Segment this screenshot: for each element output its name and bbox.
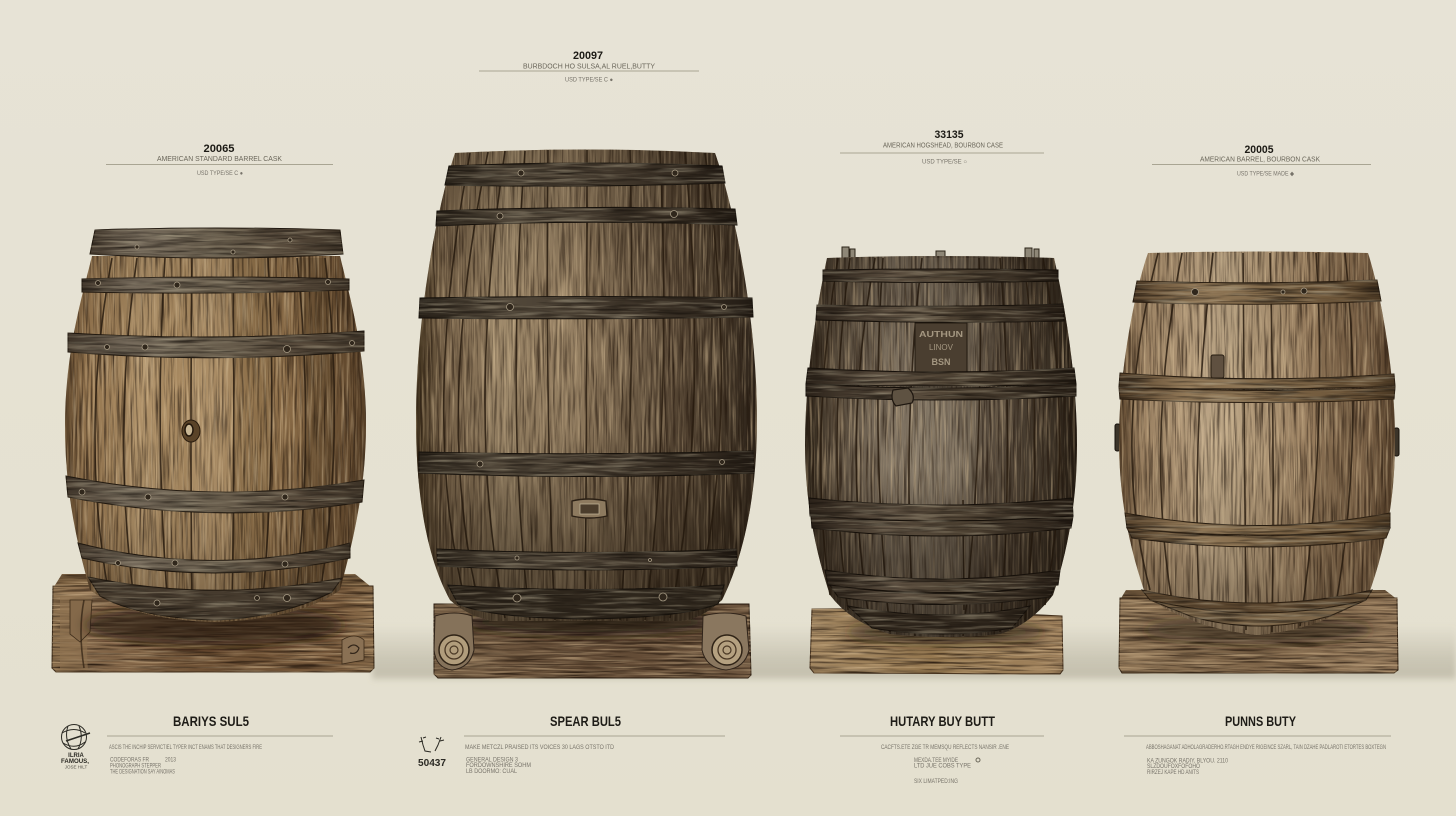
capacity label 4 <box>1152 144 1371 178</box>
icon: antlers: 50437 <box>418 758 446 769</box>
rivets 2 <box>477 170 726 602</box>
icon: globe seal: JOSE HILT <box>65 764 87 770</box>
barrel body 1 <box>65 256 366 622</box>
barrel 4: Punns Buty <box>1115 252 1399 673</box>
capacity label 4: USD TYPE/SE MADE ◆ <box>1237 172 1294 178</box>
capacity label 1: 20065 <box>204 143 234 155</box>
hasp 3 <box>892 388 913 406</box>
wooden base 3 <box>810 609 1063 674</box>
footer: Bariys Sul5: CODEFORAS FR <box>110 758 150 764</box>
barrel 1: Bariys Sul5 <box>52 228 374 672</box>
footer: Bariys Sul5: PHONOGRAPH STEPPER <box>110 764 161 770</box>
footer: Punns Buty: PUNNS BUTY <box>1225 713 1297 729</box>
footer: Spear Bul5 <box>464 713 725 775</box>
icon: antlers <box>418 737 446 769</box>
capacity label 3: AMERICAN HOGSHEAD, BOURBON CASE <box>883 142 1003 150</box>
staves 2 <box>416 150 757 621</box>
staves 1 <box>65 256 366 622</box>
capacity label 2: 20097 <box>573 50 603 62</box>
barrel body 3 <box>805 256 1077 637</box>
icon: globe seal: ILRIA <box>68 753 84 759</box>
footer: Spear Bul5: SPEAR BUL5 <box>550 713 621 729</box>
capacity label 3: USD TYPE/SE ○ <box>922 160 967 166</box>
capacity label 3 <box>840 129 1044 166</box>
pegs 3 <box>842 247 1039 260</box>
stamped plate 3: BSN <box>931 357 951 367</box>
wooden hoops 3 <box>806 269 1076 634</box>
floor shadow <box>372 625 1456 682</box>
capacity label 2: USD TYPE/SE C ● <box>565 78 613 84</box>
iron hoops 1 <box>66 228 364 620</box>
footer: Bariys Sul5: ASCIS THE INCHIP SERVICTIEL TYPER INCT ENAMS THAT DESIGNERS FIRE <box>109 745 262 751</box>
footer: Bariys Sul5: THE DESIGNATION SAY AINOMAS <box>110 770 175 776</box>
capacity label 1: USD TYPE/SE C ● <box>197 171 243 177</box>
barrel 3: Hutary Buy Butt <box>805 247 1077 674</box>
footer: Spear Bul5: GENERAL DESIGN 3 <box>466 758 519 764</box>
staves 3 <box>805 256 1077 637</box>
capacity label 4: 20005 <box>1244 144 1274 156</box>
footer: Spear Bul5: FORDOWNSHIRE SOHM <box>466 763 531 769</box>
capacity label 1 <box>106 143 333 177</box>
stamped plate 3: LINOV <box>929 343 954 352</box>
footer: Hutary Buy Butt <box>840 713 1044 785</box>
wooden hoops 4 <box>1119 280 1395 626</box>
capacity label 4: AMERICAN BARREL, BOURBON CASK <box>1200 156 1320 164</box>
side handles 4 <box>1115 424 1399 456</box>
footer: Hutary Buy Butt: HUTARY BUY BUTT <box>890 713 995 729</box>
rivets 1 <box>79 238 354 606</box>
footer: Spear Bul5: MAKE METCZL PRAISED ITS VOICES 30 LAGS OTSTO ITD <box>465 745 615 751</box>
footer: Spear Bul5: LB DOORMO: CUAL <box>466 769 518 775</box>
wooden base 4 <box>1119 590 1398 673</box>
bung 4 <box>1211 355 1224 378</box>
footer: Hutary Buy Butt: CACFTS.ETE ZGE TR MEMSQU REFLECTS NANSIR .ENE <box>881 745 1009 751</box>
footer: Hutary Buy Butt: MEXDA.TEE MYIDE <box>914 758 958 764</box>
footer: Hutary Buy Butt: SIX LIMATPED:ING <box>914 779 958 785</box>
barrel body 2 <box>416 150 757 621</box>
capacity label 2 <box>479 50 699 84</box>
footer: Punns Buty <box>1124 713 1391 776</box>
footer: Bariys Sul5 <box>107 713 333 776</box>
barrel body 4 <box>1119 252 1395 635</box>
staves 4 <box>1119 252 1395 635</box>
stamped plate 3: AUTHUN <box>919 330 963 339</box>
footer: Bariys Sul5: 2013 <box>165 758 177 764</box>
footer: Hutary Buy Butt: LTD JUE COBS TYPE <box>914 764 971 770</box>
footer: Punns Buty: KA ZUNGOK RADIY, BLYOU. 2110 <box>1147 758 1229 764</box>
capacity label 1: AMERICAN STANDARD BARREL CASK <box>157 156 282 163</box>
barrel 2: Spear Bul5 <box>416 150 757 678</box>
capacity label 2: BURBDOCH HO SULSA,AL RUEL,BUTTY <box>523 64 655 70</box>
iron hoops 2 <box>419 163 754 619</box>
footer: Punns Buty: SLZDOUFOXFOFOHO <box>1147 764 1200 770</box>
footer: Punns Buty: RIRZEJ KAPE HD ANITS <box>1147 770 1199 776</box>
rivets 4 <box>1192 288 1307 296</box>
wooden base 2 <box>434 604 751 678</box>
stamped plate 3 <box>915 323 967 373</box>
emblem plate 2 <box>572 499 607 518</box>
wooden base 1 <box>52 574 374 672</box>
capacity label 3: 33135 <box>934 129 964 141</box>
bung hole 1 <box>182 420 200 442</box>
footer: Bariys Sul5: BARIYS SUL5 <box>173 713 249 729</box>
icon: globe seal: FAMOUS, <box>61 759 89 765</box>
icon: globe seal <box>61 724 90 770</box>
